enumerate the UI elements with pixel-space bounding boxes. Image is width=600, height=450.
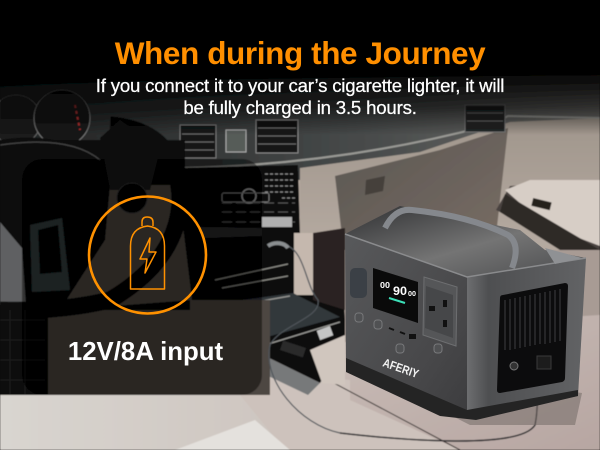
steering wheel and instruments [0, 90, 270, 395]
subtitle text [96, 75, 504, 118]
translucent dark input panel [22, 159, 262, 395]
brand logo: AFERIY [381, 356, 421, 381]
icon: battery with lightning bolt in circle [88, 195, 208, 315]
USB-C port cover [350, 268, 367, 298]
top dark gradient [0, 0, 600, 135]
station side face [467, 258, 586, 418]
power station: Aferiy [345, 206, 586, 425]
front buttons and ports [355, 313, 442, 353]
display readouts: 00 [408, 291, 416, 298]
input spec label: 12V/8A input [68, 338, 223, 366]
AC socket panel [423, 277, 457, 346]
station lid [345, 206, 586, 277]
station front face [345, 234, 467, 418]
side DC and AC inlets [510, 362, 518, 370]
display readouts [380, 281, 416, 298]
carry handle [385, 210, 516, 268]
side vent [497, 283, 568, 393]
title: When during the Journey [115, 35, 485, 71]
subtitle text: be fully charged in 3.5 hours. [183, 97, 417, 118]
dashboard air vents and clock [180, 105, 505, 158]
LCD display [373, 268, 418, 323]
display readouts: 00 [380, 281, 391, 290]
display readouts: 90 [393, 284, 407, 298]
station base [346, 358, 578, 420]
subtitle text: If you connect it to your car’s cigarette lighter, it will [96, 75, 504, 96]
centre console [178, 165, 345, 395]
charging cable from car socket [268, 243, 537, 441]
station shadow [346, 362, 582, 425]
